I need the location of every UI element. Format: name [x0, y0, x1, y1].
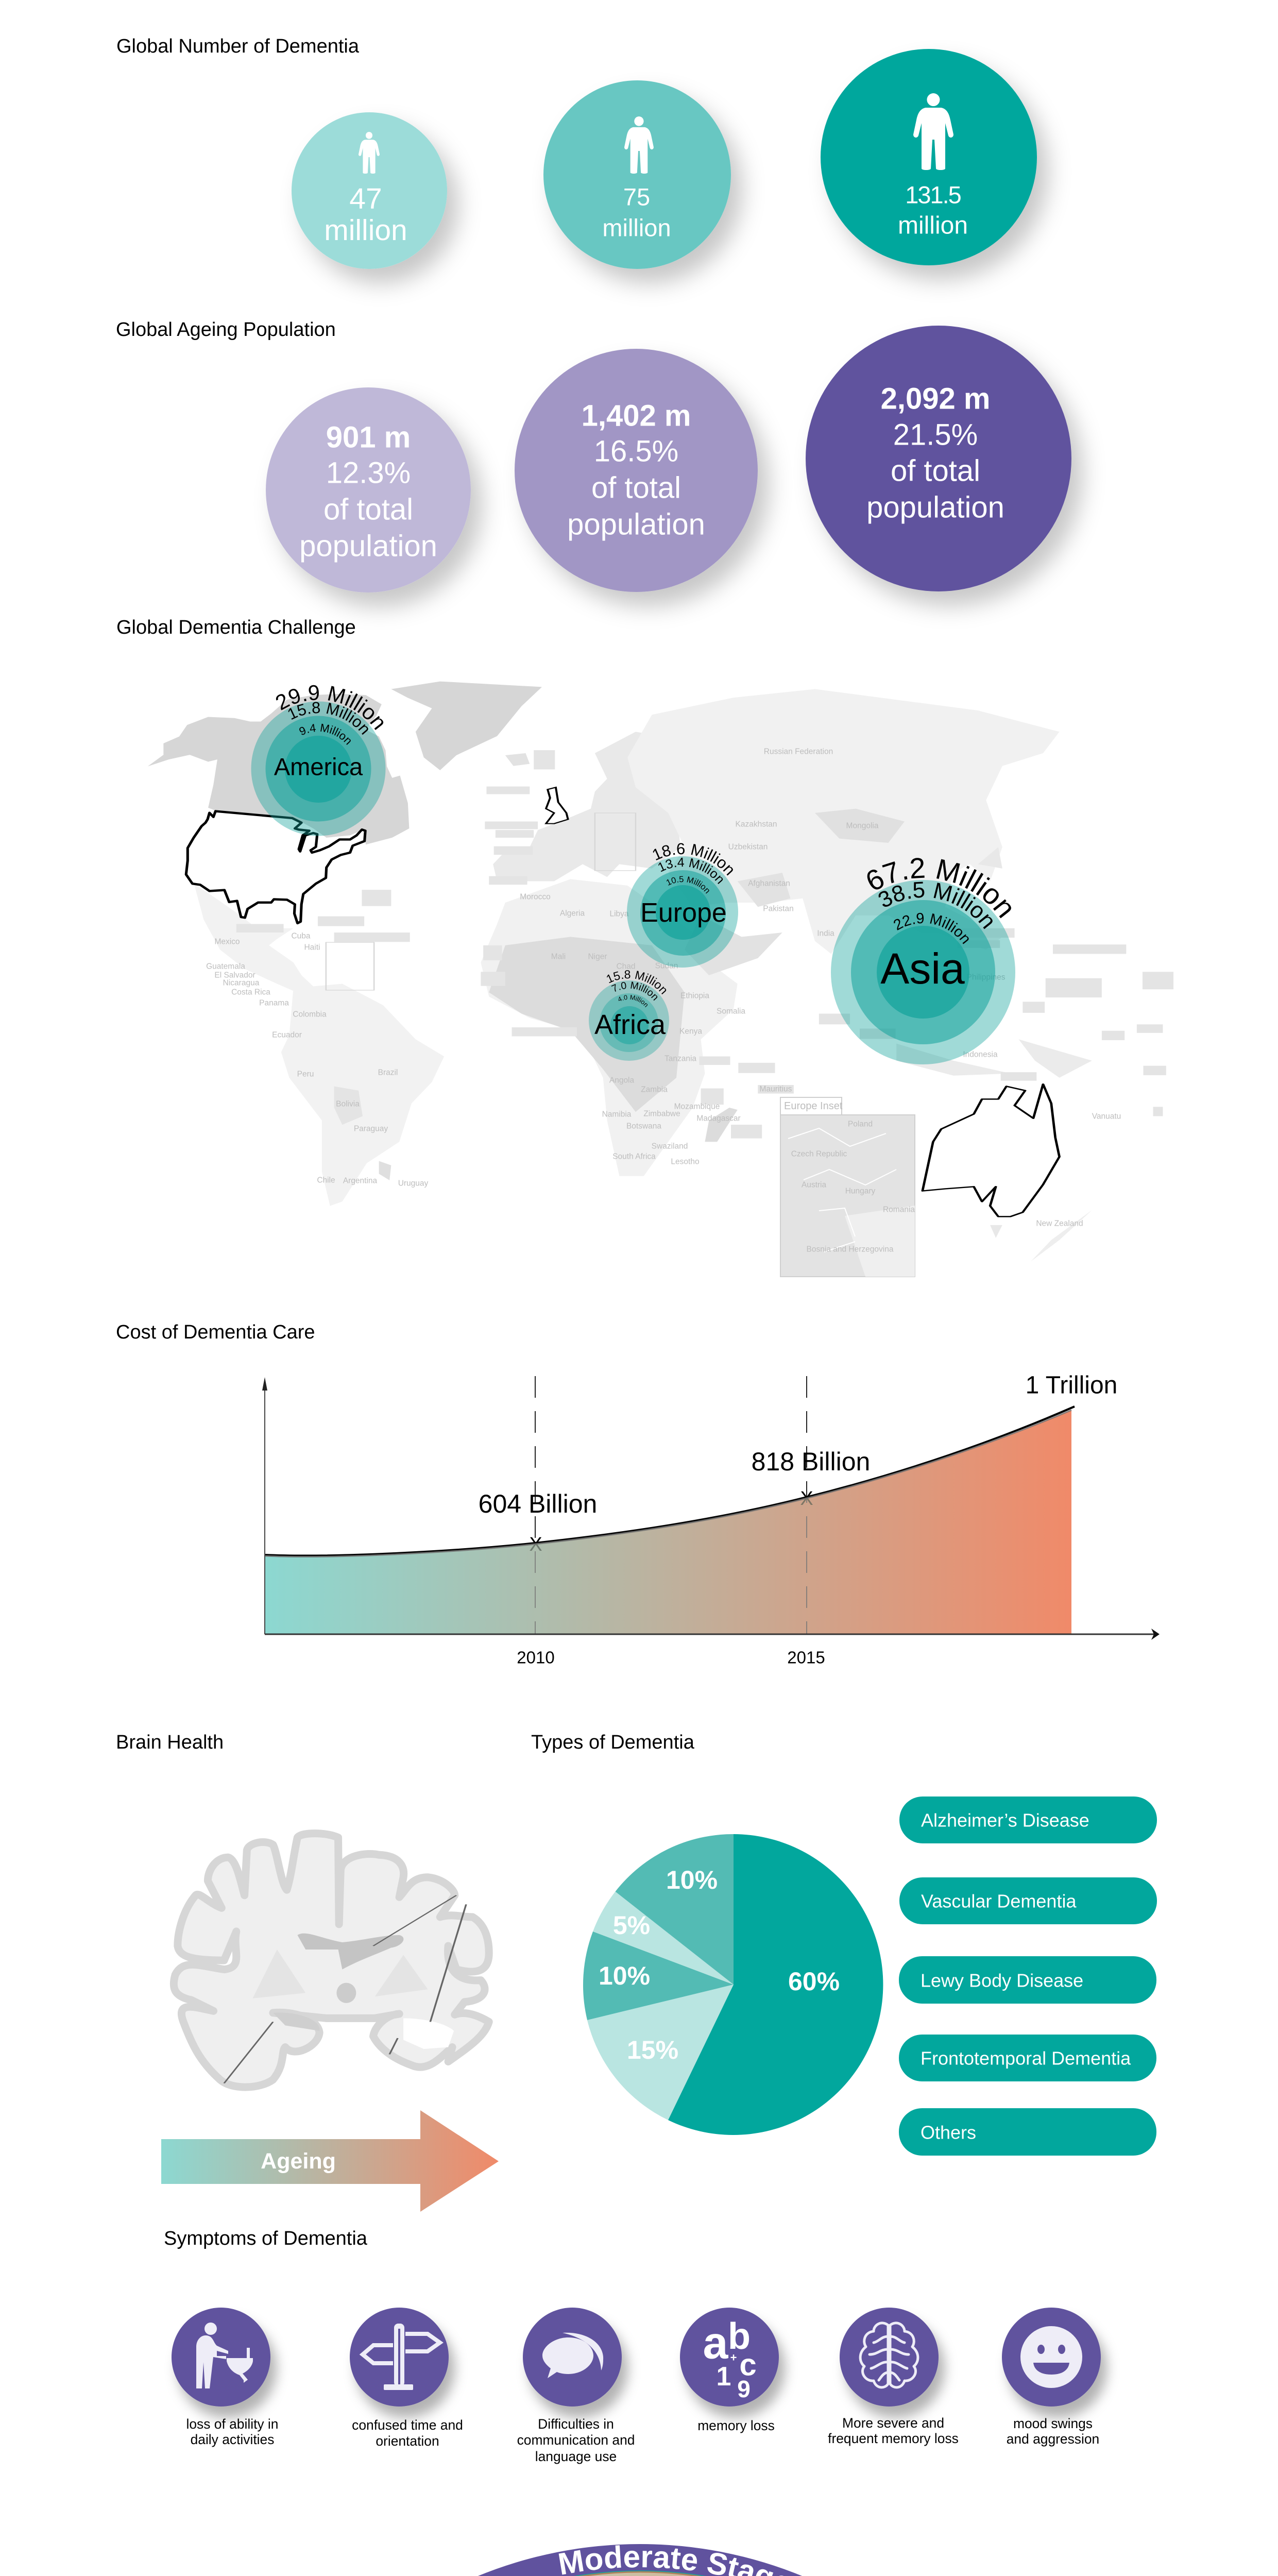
symptom: memory loss: + [730, 2351, 737, 2364]
symptom: memory loss: a [703, 2317, 729, 2368]
world map: South Africa [612, 1152, 656, 1161]
world map: El Salvador [214, 971, 255, 980]
pie chart: types of dementia: 15% [627, 2036, 678, 2064]
circle: 2,092 m: 21.5% [893, 418, 978, 451]
area chart: cost of dementia care: 2010 [517, 1648, 555, 1667]
bubble: America: 9.4 Million [299, 723, 351, 745]
world map: Mozambique [674, 1103, 720, 1111]
world map: Russian Federation [764, 747, 833, 756]
symptom: memory loss: c [739, 2347, 757, 2382]
circle: 1,402 m: of total [591, 471, 681, 505]
circle: 1,402 m [515, 349, 758, 592]
heading: Brain Health: Brain Health [116, 1732, 224, 1753]
symptom: memory loss: 9 [737, 2376, 751, 2402]
world map: Chad [616, 962, 636, 971]
bubble: Asia: 67.2 Million [867, 858, 1011, 918]
symptom: difficulties in communication: Difficulties in [538, 2416, 614, 2432]
heading: Symptoms of Dementia: Symptoms of Dementia [164, 2228, 368, 2249]
circle: 901 m [266, 387, 471, 592]
world map: India [817, 929, 834, 938]
world map: Zimbabwe [643, 1110, 680, 1118]
world map: Brazil [378, 1069, 398, 1077]
world map: Kazakhstan [736, 820, 777, 828]
area chart: cost of dementia care: 604 Billion [479, 1489, 597, 1518]
symptom: confused time and orientation: confused time and [352, 2417, 463, 2433]
world map: Namibia [602, 1110, 632, 1119]
europe inset: Hungary [845, 1187, 876, 1195]
bubble: Europe: 10.5 Million [667, 876, 709, 893]
area chart: cost of dementia care: 2015 [787, 1648, 825, 1667]
world map: Costa Rica [231, 988, 270, 996]
area chart: cost of dementia care: X [529, 1534, 542, 1555]
world map: Philippines [967, 973, 1006, 982]
area chart: cost of dementia care: 818 Billion [752, 1447, 870, 1476]
world map: Niger [588, 952, 607, 961]
area chart: cost of dementia care: X [800, 1488, 813, 1510]
world map [119, 682, 1173, 1261]
legend pill: Others [899, 2108, 1156, 2156]
symptom: memory loss: 1 [717, 2362, 731, 2392]
europe inset: Poland [848, 1120, 873, 1128]
world map: Tanzania [664, 1054, 696, 1063]
world map: Uzbekistan [728, 843, 768, 851]
world map: Uruguay [398, 1179, 429, 1188]
europe inset [780, 1097, 915, 1277]
pie chart: types of dementia: 5% [613, 1911, 650, 1940]
world map: Lesotho [671, 1157, 700, 1166]
bubble: Africa [589, 970, 669, 1061]
world map: Nicaragua [223, 979, 260, 987]
heading: Global Ageing Population: Global Ageing Population [116, 319, 336, 341]
europe inset: Romania [883, 1206, 915, 1214]
symptom: confused time and orientation: orientation [376, 2433, 439, 2449]
bubble: America: 29.9 Million [276, 685, 383, 730]
area chart: cost of dementia care: 1 Trillion [1026, 1371, 1117, 1399]
circle: 47 million: million [324, 214, 407, 247]
bubble: Europe [627, 843, 738, 968]
UK outline [546, 787, 568, 824]
legend pill: Frontotemporal Dementia [899, 2035, 1156, 2081]
circle: 47 million: 47 [349, 182, 382, 215]
bubble: America: America [274, 753, 363, 780]
Australia outline [923, 1084, 1060, 1216]
circle: 2,092 m: population [866, 490, 1004, 524]
world map: Swaziland [652, 1142, 688, 1151]
arrow: Ageing [161, 2110, 499, 2212]
world map: Somalia [717, 1007, 745, 1016]
world map: Haiti [304, 943, 320, 952]
symptom: mood swings [1002, 2308, 1101, 2447]
world map: Vanuatu [1092, 1112, 1121, 1121]
world map: Angola [609, 1076, 635, 1085]
pie chart: types of dementia [583, 1834, 883, 2135]
world map: Mexico [214, 938, 240, 946]
world map: Chile [317, 1176, 335, 1185]
bubble: Asia: Asia [880, 944, 965, 993]
bubble: Africa: 15.8 Million [607, 970, 667, 994]
bubble: America: 15.8 Million [288, 702, 368, 735]
europe inset: Czech Republic [791, 1150, 847, 1158]
world map: Libya [609, 910, 629, 918]
world map: Ethiopia [680, 991, 709, 1001]
circle: 1,402 m: population [567, 508, 705, 541]
world map: Sudan [655, 961, 678, 971]
symptom: loss of ability: loss of ability in [186, 2416, 278, 2432]
world map: Paraguay [354, 1124, 388, 1133]
legend pill: Vascular Dementia [899, 1877, 1157, 1924]
circle: 1,402 m: 1,402 m [582, 399, 691, 433]
area chart: cost of dementia care: X [529, 1534, 542, 1555]
world map: Pakistan [763, 905, 794, 913]
world map: New Zealand [1036, 1219, 1083, 1228]
pie chart: types of dementia: 60% [788, 1967, 840, 1996]
circle: 2,092 m: 2,092 m [881, 382, 990, 415]
world map: Cuba [291, 931, 311, 941]
symptom: difficulties in communication [517, 2308, 635, 2464]
world map: Madagascar [696, 1114, 741, 1123]
circle: 75 million: 75 [623, 183, 650, 210]
circle: 75 million: million [602, 214, 671, 241]
world map: Bolivia [336, 1099, 360, 1109]
world map: Mauritius [760, 1085, 792, 1093]
symptom: memory loss: memory loss [697, 2418, 775, 2433]
wheel: ring and segments [213, 2544, 1067, 2576]
world map: Argentina [343, 1177, 378, 1185]
brain cross-section [174, 1834, 489, 2087]
legend pill: Lewy Body Disease: Lewy Body Disease [921, 1970, 1083, 1991]
bubble: Europe: 13.4 Million [658, 857, 723, 884]
pie chart: types of dementia: 10% [599, 1961, 650, 1990]
world map: Afghanistan [748, 879, 790, 888]
europe inset: Austria [802, 1181, 826, 1189]
circle: 47 million [292, 112, 447, 269]
heading: Types of Dementia: Types of Dementia [531, 1732, 695, 1753]
bubble: Asia [831, 858, 1015, 1064]
symptom: memory loss [680, 2308, 779, 2433]
world map: Indonesia [963, 1050, 998, 1059]
legend pill: Alzheimer's Disease [899, 1797, 1157, 1843]
circle: 2,092 m [806, 326, 1071, 591]
legend pill: Vascular Dementia: Vascular Dementia [921, 1891, 1077, 1911]
symptom: memory loss: b [728, 2316, 751, 2357]
world map: Colombia [293, 1010, 327, 1019]
area chart: cost of dementia care: X [800, 1488, 813, 1510]
world map: Algeria [560, 909, 585, 918]
world map: Morocco [520, 892, 551, 902]
circle: 1,402 m: 16.5% [594, 435, 678, 468]
USA outline [186, 811, 365, 923]
symptom: loss of ability [172, 2308, 278, 2447]
legend pill: Frontotemporal Dementia: Frontotemporal Dementia [921, 2047, 1131, 2069]
bubble: Africa: Africa [594, 1009, 666, 1040]
world map: Zambia [641, 1085, 668, 1094]
bubble: Africa: 4.0 Million [618, 995, 648, 1008]
bubble: Asia: 38.5 Million [879, 882, 993, 929]
symptom: confused time and orientation [350, 2308, 463, 2449]
symptom: difficulties in communication: language use [535, 2449, 617, 2464]
symptom: difficulties in communication: communication and [517, 2432, 635, 2448]
circle: 75 million [543, 80, 731, 269]
arrow: Ageing: Ageing [261, 2149, 336, 2174]
world map: Peru [297, 1070, 314, 1079]
bubble: Africa: 7.0 Million [611, 981, 657, 1001]
pie chart: types of dementia: 10% [666, 1866, 718, 1894]
circle: 131.5 million [821, 49, 1037, 265]
world map: Panama [259, 998, 289, 1008]
circle: 901 m: 12.3% [326, 456, 411, 489]
legend pill: Others: Others [921, 2122, 976, 2143]
bubble: Europe: Europe [640, 898, 727, 928]
legend pill: Lewy Body Disease [899, 1956, 1156, 2004]
world map: Botswana [626, 1122, 661, 1130]
circle: 131.5 million: 131.5 [905, 181, 961, 208]
circle: 2,092 m: of total [891, 454, 980, 487]
world map: Mongolia [846, 821, 879, 831]
europe inset: Bosnia and Herzegovina [807, 1245, 894, 1254]
symptom: more severe memory loss: More severe and [842, 2415, 944, 2431]
world map: Kenya [679, 1027, 702, 1036]
area chart: cost of dementia care [262, 1371, 1160, 1667]
europe inset: Europe Inset [784, 1100, 843, 1112]
bubble: Europe: 18.6 Million [653, 843, 733, 876]
symptom: loss of ability: daily activities [191, 2432, 274, 2447]
bubble: Asia: 22.9 Million [894, 913, 969, 944]
heading: Global Dementia Challenge: Global Dementia Challenge [116, 617, 356, 638]
symptom: mood swings: mood swings [1013, 2416, 1093, 2431]
bubble: America [251, 685, 385, 836]
circle: 901 m: 901 m [326, 420, 411, 454]
world map: Mali [551, 952, 566, 961]
circle: 901 m: of total [323, 493, 413, 527]
circle: 901 m: population [299, 530, 437, 563]
symptom: mood swings: and aggression [1007, 2431, 1099, 2447]
heading: Global Number of Dementia: Global Number of Dementia [116, 36, 360, 57]
world map: Ecuador [272, 1030, 302, 1040]
symptom: more severe memory loss [828, 2308, 959, 2446]
legend pill: Alzheimer's Disease: Alzheimer’s Disease [921, 1809, 1089, 1831]
world map: Guatemala [206, 962, 245, 971]
heading: Cost of Dementia Care: Cost of Dementia Care [116, 1321, 315, 1343]
symptom: more severe memory loss: frequent memory loss [828, 2431, 959, 2446]
circle: 131.5 million: million [898, 212, 968, 239]
